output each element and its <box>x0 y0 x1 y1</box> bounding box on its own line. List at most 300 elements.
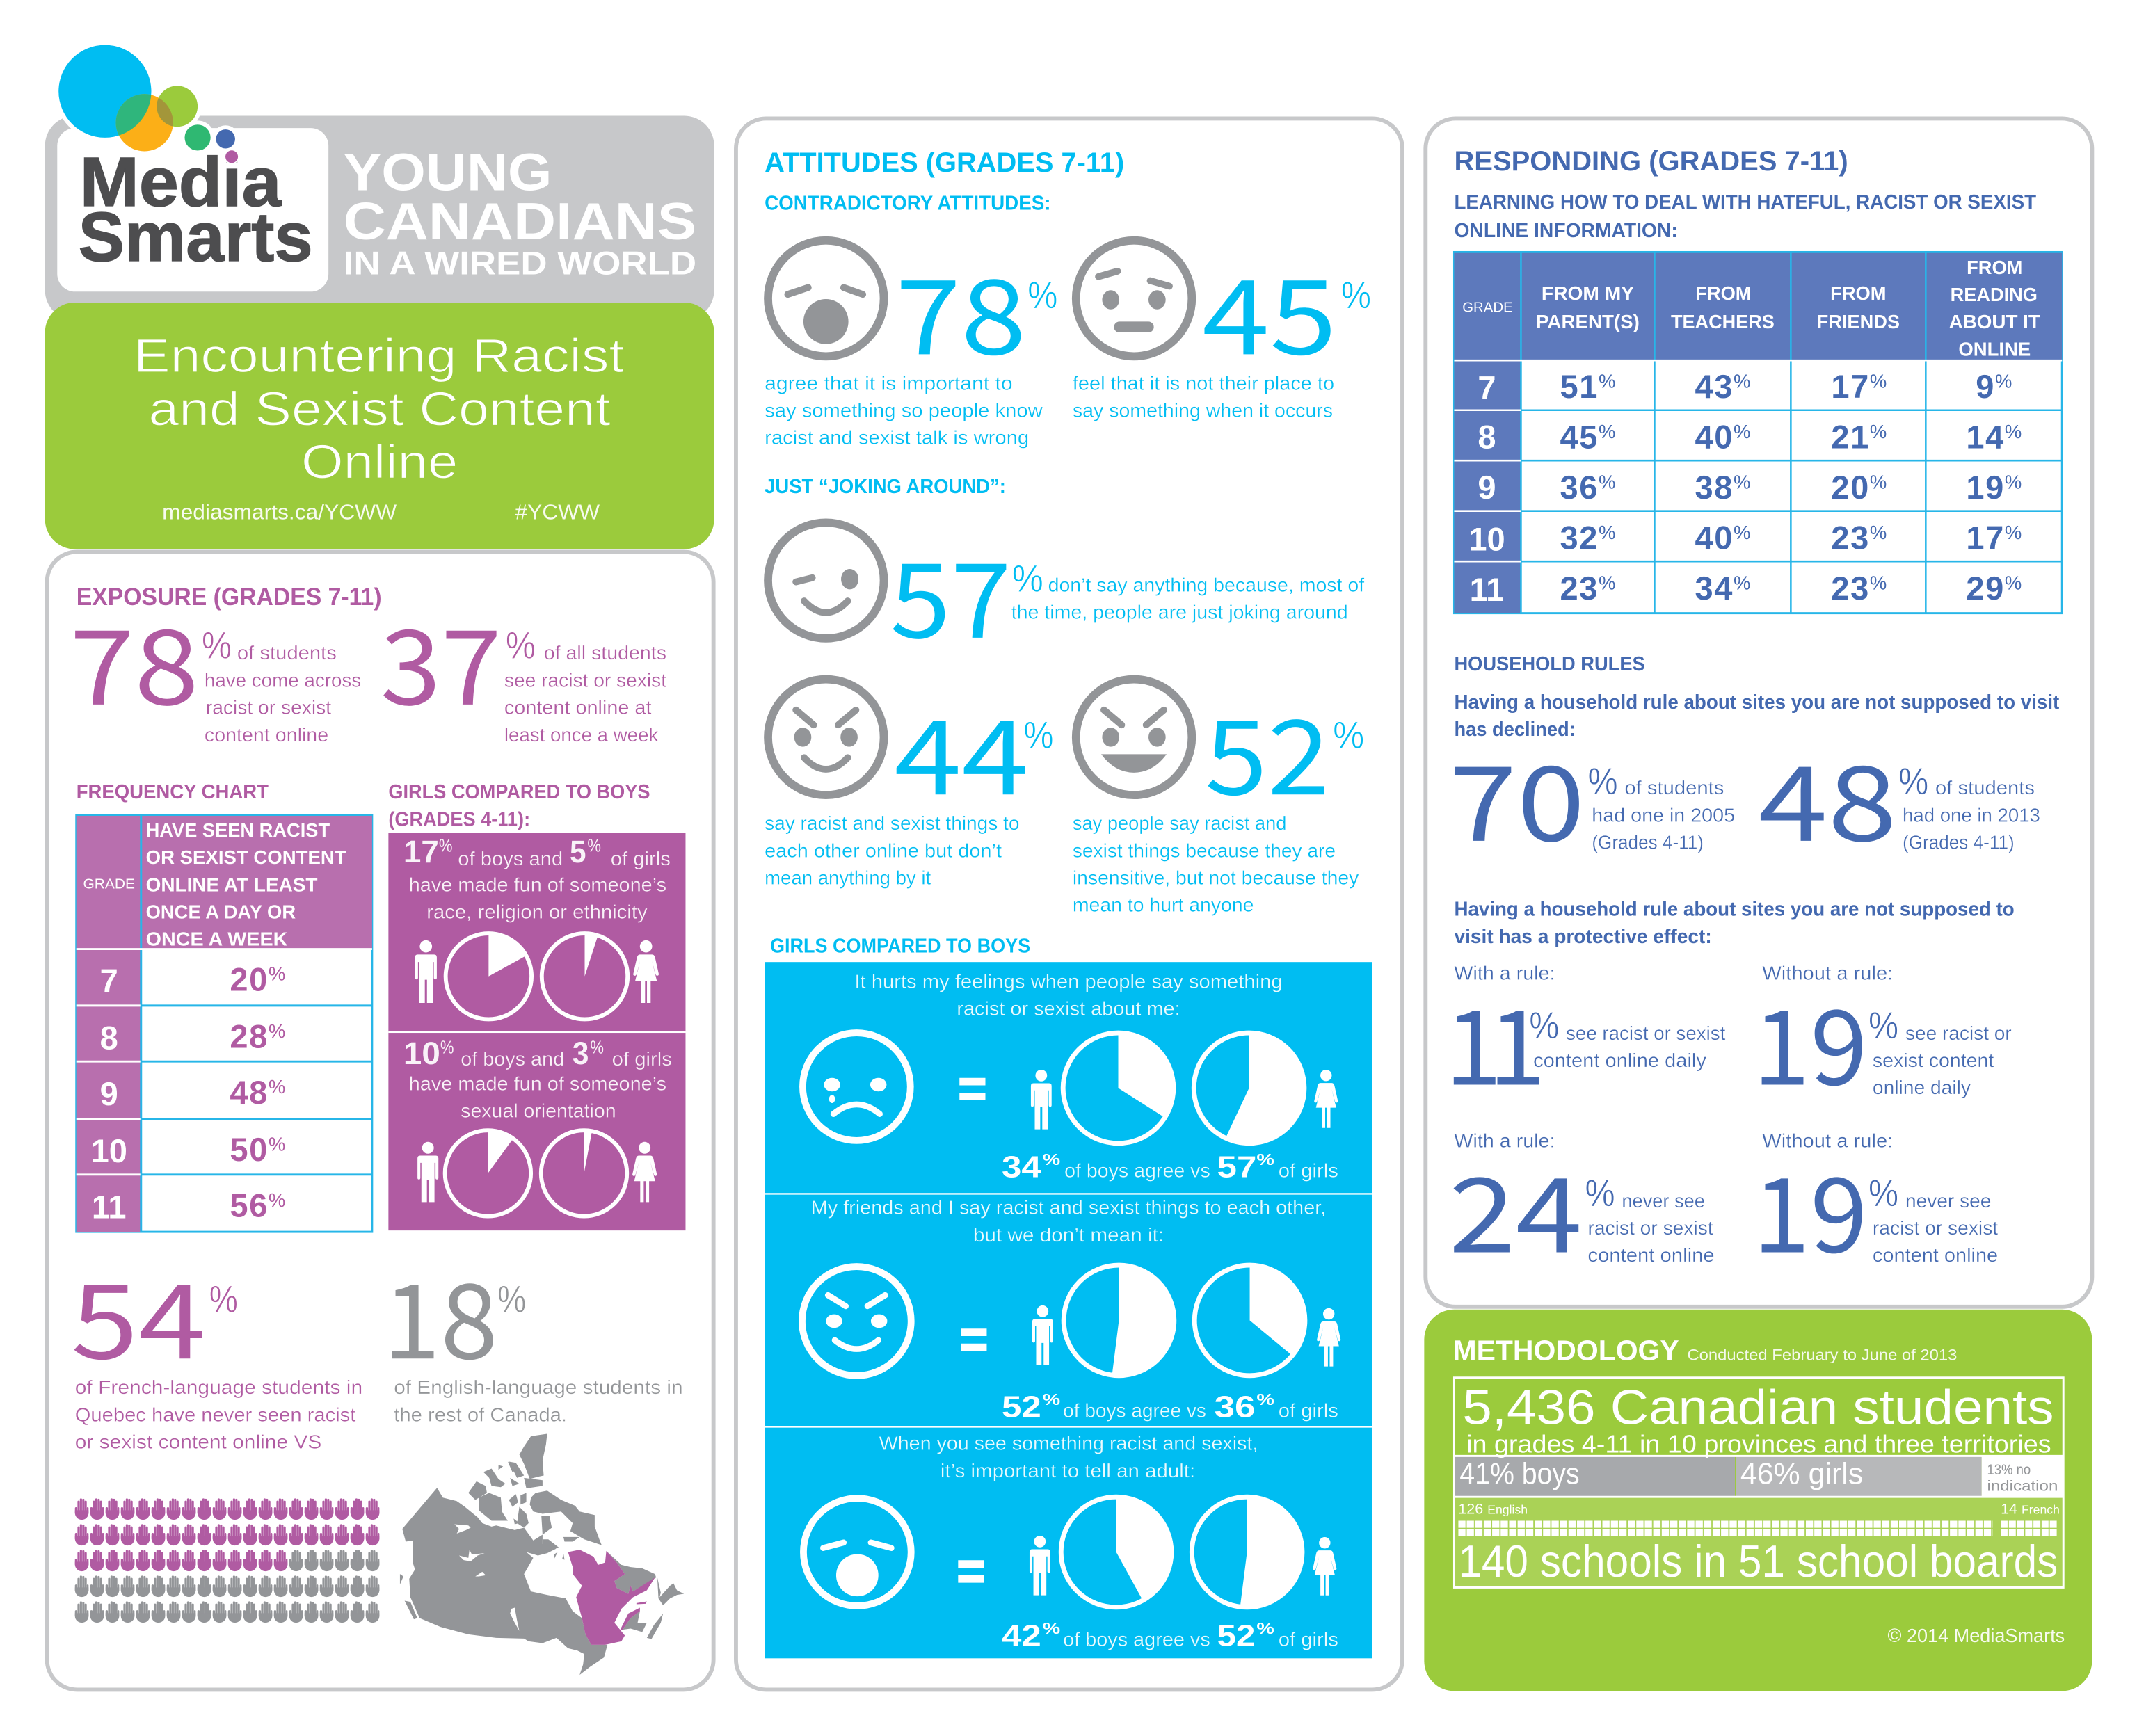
stat: 52 percent: % <box>1333 714 1364 757</box>
stat: 52 percent: mean to hurt anyone <box>1073 894 1254 916</box>
icon: girl <box>632 1142 657 1202</box>
table: frequency chart: % <box>269 1020 285 1042</box>
table: learning sources by grade: 51 <box>1560 368 1599 405</box>
stat: without a rule 19 percent: see racist or <box>1905 1022 2012 1044</box>
table: learning sources by grade: 10 <box>1468 521 1505 558</box>
pie chart: boys 52 percent <box>1064 1263 1176 1378</box>
title: Encountering Racist <box>134 329 624 383</box>
question: hurts my feelings <box>854 970 1283 1020</box>
stat: without a rule 19 percent: online daily <box>1873 1077 1971 1098</box>
stat: 54 percent French-language students: Quebec have never seen racist <box>75 1404 356 1425</box>
pie chart: girls 5 percent <box>542 933 627 1019</box>
stat: without a rule 19 percent never see: racist or sexist <box>1873 1217 1998 1239</box>
question: don't mean it: My friends and I say racist and sexist things to each other, <box>811 1197 1326 1219</box>
result: 52 vs 36: of boys agree vs <box>1063 1400 1206 1422</box>
table: learning sources by grade: 19 <box>1966 469 2005 506</box>
table: learning sources by grade: FROM <box>1695 282 1752 304</box>
table: learning sources by grade: % <box>1995 370 2012 392</box>
text: sexual orientation <box>403 1036 672 1122</box>
stat: 52 percent: insensitive, but not because they <box>1073 867 1359 889</box>
stat: 70 percent in 2005: (Grades 4-11) <box>1592 832 1704 853</box>
table: frequency chart: ONCE A DAY OR <box>146 900 296 922</box>
text: race, religion or ethnicity: race, religion or ethnicity <box>426 901 648 922</box>
table: learning sources by grade: % <box>1599 421 1615 442</box>
stat: without a rule 19 percent never see: Without a rule: <box>1762 1130 1893 1152</box>
icon: girl <box>1313 1537 1336 1596</box>
table: learning sources by grade: FROM <box>1830 282 1887 304</box>
table: frequency chart: 7 <box>100 962 118 999</box>
icon: shouting face <box>768 241 884 356</box>
subheading: girls compared to boys: GIRLS COMPARED TO BOYS <box>770 935 1030 957</box>
stat: with a rule 24 percent: never see <box>1622 1190 1705 1212</box>
icon: girl <box>1314 1070 1338 1128</box>
symbol: equals <box>961 1328 986 1351</box>
stat: 78 percent: % <box>202 623 232 666</box>
stat: 37 percent <box>381 584 666 746</box>
stat: 37 percent: of all students <box>544 642 666 664</box>
icon: winking face <box>768 522 884 638</box>
stat: without a rule 19 percent never see: 19 <box>1753 1132 1868 1282</box>
pie chart: boys 42 percent <box>1061 1495 1174 1607</box>
stat: 44 percent: 44 <box>894 674 1029 824</box>
text: sexual orientation: have made fun of someone’s <box>409 1072 666 1094</box>
panel: attitudes <box>736 118 1402 1689</box>
result: 52 vs 36: 52 <box>1002 1391 1041 1424</box>
text: rule has declined <box>1454 691 2060 741</box>
pie chart: girls 3 percent <box>541 1130 627 1216</box>
stat: 57 percent: the time, people are just joking around <box>1011 601 1348 622</box>
result: 42 vs 52: of girls <box>1279 1629 1338 1650</box>
title: Online <box>301 435 458 489</box>
panel: responding <box>1425 118 2092 1307</box>
table: frequency chart: GRADE <box>83 876 135 892</box>
text: protective effect: Having a household rule about sites you are not supposed to <box>1454 899 2015 921</box>
table: learning sources by grade: % <box>1870 572 1887 593</box>
chart: sample breakdown: 5,436 Canadian students <box>1462 1379 2054 1434</box>
text: protective effect <box>1454 899 2015 948</box>
text: sexual orientation: 3 <box>573 1036 589 1071</box>
chart: sample breakdown: 14 French <box>2001 1500 2060 1518</box>
text: race, religion or ethnicity: % <box>439 836 452 855</box>
result: 42 vs 52 <box>1002 1619 1338 1653</box>
table: frequency chart: 56 <box>230 1187 269 1224</box>
text: sexual orientation: sexual orientation <box>461 1100 616 1122</box>
icon: boy <box>1031 1070 1052 1130</box>
table: learning sources by grade: % <box>1870 421 1887 442</box>
links: mediasmarts.ca/YCWW <box>162 501 397 524</box>
table: learning sources by grade: 7 <box>1478 369 1496 406</box>
text: race, religion or ethnicity: of boys and <box>458 848 563 869</box>
result: 52 vs 36 <box>1002 1390 1338 1424</box>
text: race, religion or ethnicity: % <box>587 836 601 855</box>
stat: 18 percent English-language students: the rest of Canada. <box>394 1404 567 1425</box>
subheading: learning how to deal: LEARNING HOW TO DEAL WITH HATEFUL, RACIST OR SEXIST <box>1454 191 2037 214</box>
table: learning sources by grade: % <box>2005 421 2022 442</box>
result: 52 vs 36: of girls <box>1279 1400 1338 1422</box>
stat: with a rule 11 percent: content online daily <box>1533 1050 1706 1071</box>
table: frequency chart: 20 <box>230 961 269 997</box>
stat: 70 percent in 2005: % <box>1587 760 1618 803</box>
stat: 48 percent in 2013: had one in 2013 <box>1903 804 2040 826</box>
table: frequency chart: ONLINE AT LEAST <box>146 873 317 895</box>
heading: frequency chart: FREQUENCY CHART <box>77 781 269 803</box>
heading: Young Canadians in a Wired World: YOUNG <box>344 143 552 201</box>
stat: 18 percent English-language students: of English-language students in <box>394 1376 683 1398</box>
table: learning sources by grade: 40 <box>1695 419 1734 456</box>
stat: 52 percent: say people say racist and <box>1073 812 1286 834</box>
stat: 78 percent: racist or sexist <box>206 697 331 718</box>
table: learning sources by grade: 32 <box>1560 520 1599 556</box>
table: frequency chart: % <box>269 1076 285 1098</box>
text: race, religion or ethnicity: have made fun of someone’s <box>409 874 666 895</box>
heading: girls compared to boys: (GRADES 4-11): <box>388 808 530 830</box>
table: learning sources by grade: 40 <box>1695 520 1734 556</box>
table: frequency chart: % <box>269 1134 285 1155</box>
table: frequency chart: HAVE SEEN RACIST <box>146 819 330 841</box>
table: learning sources by grade: FRIENDS <box>1817 310 1900 332</box>
heading: methodology: METHODOLOGY <box>1452 1334 1679 1366</box>
pie chart: boys 17 percent <box>446 933 531 1019</box>
stat: 70 percent in 2005 <box>1449 721 1735 871</box>
table: learning sources by grade: 11 <box>1470 571 1504 608</box>
subheading: household rules: HOUSEHOLD RULES <box>1454 653 1645 675</box>
table: frequency chart: 9 <box>100 1075 118 1112</box>
stat: 18 percent English-language students <box>383 1238 683 1425</box>
stat: without a rule 19 percent never see <box>1753 1130 1998 1282</box>
stat: without a rule 19 percent: sexist content <box>1873 1050 1994 1071</box>
stat: 37 percent: see racist or sexist <box>504 669 666 691</box>
heading: methodology <box>1452 1334 1957 1366</box>
icon: girl <box>633 940 659 1003</box>
stat: 78 percent: 78 <box>895 234 1026 384</box>
chart: sample breakdown: 13% no <box>1987 1461 2031 1478</box>
stat: without a rule 19 percent: Without a rule: <box>1762 963 1893 984</box>
heading: girls compared to boys <box>388 781 650 830</box>
stat: 48 percent in 2013: % <box>1898 760 1928 803</box>
stat: without a rule 19 percent: 19 <box>1753 965 1868 1115</box>
stat: 70 percent in 2005: of students <box>1624 777 1724 798</box>
result: 34 vs 57: 34 <box>1002 1151 1041 1184</box>
text: rule has declined: Having a household rule about sites you are not supposed to visit <box>1454 691 2060 714</box>
stat: without a rule 19 percent never see: content online <box>1873 1244 1998 1266</box>
text: rule has declined: has declined: <box>1454 718 1576 741</box>
stat: without a rule 19 percent never see: % <box>1868 1171 1898 1214</box>
stat: 78 percent: racist and sexist talk is wrong <box>765 427 1029 449</box>
icon: boy <box>1030 1536 1050 1596</box>
heading: methodology: Conducted February to June of 2013 <box>1687 1346 1957 1363</box>
stat: 48 percent in 2013 <box>1758 721 2040 871</box>
stat: 78 percent <box>765 234 1057 449</box>
text: sexual orientation: % <box>440 1038 454 1057</box>
stat: with a rule 11 percent: 1 <box>1488 965 1546 1115</box>
table: learning sources by grade: FROM <box>1967 256 2022 278</box>
chart: sample breakdown: in grades 4-11 in 10 provinces and three territories <box>1466 1429 2051 1458</box>
icon: boy <box>417 1142 438 1202</box>
result: 34 vs 57: of girls <box>1279 1160 1338 1182</box>
icon: boy <box>415 940 437 1003</box>
chart: sample breakdown: indication <box>1987 1477 2058 1494</box>
question: tell an adult: When you see something racist and sexist, <box>879 1433 1258 1454</box>
table: frequency chart: 48 <box>230 1074 269 1111</box>
table: frequency chart: 10 <box>91 1132 127 1169</box>
result: 42 vs 52: % <box>1256 1619 1274 1637</box>
subheading: just joking around: JUST “JOKING AROUND”: <box>765 476 1006 498</box>
table: learning sources by grade: % <box>1870 471 1887 492</box>
table: learning sources by grade: % <box>2005 522 2022 543</box>
links <box>162 501 600 524</box>
stat: 44 percent: % <box>1023 714 1053 757</box>
stat: 44 percent: each other online but don’t <box>765 839 1002 861</box>
table: frequency chart: 50 <box>230 1131 269 1168</box>
stat: 45 percent <box>1073 234 1371 421</box>
stat: 45 percent: 45 <box>1202 234 1337 384</box>
table: learning sources by grade: 23 <box>1831 570 1870 606</box>
stat: 78 percent: of students <box>237 642 337 664</box>
stat: with a rule 11 percent <box>1445 963 1726 1115</box>
heading: Young Canadians in a Wired World: CANADIANS <box>344 192 696 250</box>
table: learning sources by grade: 21 <box>1831 419 1870 456</box>
copyright: © 2014 MediaSmarts <box>1887 1625 2065 1646</box>
table: learning sources by grade: % <box>1599 370 1615 392</box>
text: sexual orientation: of girls <box>612 1048 672 1070</box>
panel: exposure <box>47 552 714 1689</box>
stat: with a rule 24 percent: With a rule: <box>1454 1130 1555 1152</box>
chart: sample breakdown: 140 schools in 51 school boards <box>1458 1536 2058 1586</box>
stat: 78 percent: % <box>1027 273 1057 316</box>
stat: with a rule 11 percent: With a rule: <box>1454 963 1555 984</box>
stat: 78 percent <box>70 584 361 746</box>
table: frequency chart: ONCE A WEEK <box>146 928 288 950</box>
table: learning sources by grade: READING <box>1951 283 2038 305</box>
result: 42 vs 52: of boys agree vs <box>1063 1629 1210 1650</box>
logo: MediaSmarts: Media <box>80 144 282 221</box>
pie chart: girls 57 percent <box>1194 1031 1306 1146</box>
stat: 70 percent in 2005: had one in 2005 <box>1592 804 1735 826</box>
stat: 78 percent: 78 <box>70 584 199 734</box>
heading: Young Canadians in a Wired World <box>344 143 696 281</box>
table: learning sources by grade: GRADE <box>1462 300 1513 316</box>
stat: 78 percent: say something so people know <box>765 400 1043 421</box>
symbol: equals <box>959 1078 985 1100</box>
stat: with a rule 24 percent: % <box>1585 1171 1615 1214</box>
table: learning sources by grade: PARENT(S) <box>1536 310 1640 332</box>
icon: crying face <box>803 1033 911 1141</box>
result: 34 vs 57 <box>1002 1150 1338 1184</box>
table: learning sources by grade: 43 <box>1695 368 1734 405</box>
table: learning sources by grade: 45 <box>1560 419 1599 456</box>
heading: exposure: EXPOSURE (GRADES 7-11) <box>77 584 382 611</box>
text: race, religion or ethnicity: 17 <box>403 834 439 869</box>
stat: 18 percent English-language students: 18 <box>383 1238 498 1388</box>
table: learning sources by grade: % <box>1870 370 1887 392</box>
table: frequency chart: 8 <box>100 1020 118 1056</box>
subheading: contradictory attitudes: CONTRADICTORY ATTITUDES: <box>765 193 1051 215</box>
heading: Young Canadians in a Wired World: IN A WIRED WORLD <box>344 244 696 281</box>
table: learning sources by grade: % <box>1599 471 1615 492</box>
table: learning sources by grade: ONLINE <box>1958 337 2031 360</box>
stat: with a rule 11 percent: see racist or sexist <box>1566 1022 1726 1044</box>
table: learning sources by grade: % <box>2005 471 2022 492</box>
result: 34 vs 57: % <box>1256 1150 1274 1168</box>
stat: 78 percent: agree that it is important to <box>765 372 1013 394</box>
stat: 48 percent in 2013: (Grades 4-11) <box>1903 832 2015 853</box>
table: learning sources by grade: % <box>1599 572 1615 593</box>
subheading: learning how to deal <box>1454 191 2037 242</box>
pie chart: boys 10 percent <box>445 1130 531 1216</box>
result: 42 vs 52: 52 <box>1217 1620 1255 1653</box>
stat: 37 percent: % <box>506 623 536 666</box>
stat: 54 percent French-language students: or sexist content online VS <box>75 1431 321 1453</box>
question: don't mean it: but we don’t mean it: <box>973 1224 1164 1246</box>
stat: 57 percent: % <box>1012 556 1043 600</box>
table: learning sources by grade: 8 <box>1478 419 1496 456</box>
stat: 78 percent: content online <box>205 724 328 746</box>
table: learning sources by grade <box>1454 252 2062 613</box>
map: Canada with Quebec highlighted <box>400 1434 684 1675</box>
table: learning sources by grade: 20 <box>1831 469 1870 506</box>
table: learning sources by grade: 14 <box>1966 419 2005 456</box>
panel: girls vs boys made fun of <box>388 833 685 1230</box>
table: learning sources by grade: 17 <box>1966 520 2005 556</box>
table: frequency chart <box>77 815 372 1232</box>
stat: 44 percent: mean anything by it <box>765 867 931 889</box>
chart: sample breakdown <box>1454 1378 2063 1587</box>
chart: sample breakdown: 41% boys <box>1459 1458 1580 1491</box>
icon: girl <box>1317 1308 1340 1367</box>
result: 52 vs 36: 36 <box>1215 1391 1255 1424</box>
table: learning sources by grade: % <box>1870 522 1887 543</box>
table: learning sources by grade: 17 <box>1831 368 1870 405</box>
table: frequency chart: 28 <box>230 1018 269 1055</box>
table: learning sources by grade: 38 <box>1695 469 1734 506</box>
stat: 70 percent in 2005: 70 <box>1449 721 1585 871</box>
text: race, religion or ethnicity: 5 <box>570 834 586 869</box>
pictogram: 100 hands, 54 highlighted <box>75 1498 379 1623</box>
table: learning sources by grade: FROM MY <box>1542 282 1634 304</box>
stat: 57 percent <box>890 517 1364 668</box>
table: learning sources by grade: TEACHERS <box>1671 310 1775 332</box>
stat: 54 percent French-language students: of French-language students in <box>75 1376 362 1398</box>
stat: 37 percent: content online at <box>504 697 652 718</box>
links: #YCWW <box>515 501 600 524</box>
result: 34 vs 57: of boys agree vs <box>1064 1160 1210 1182</box>
table: learning sources by grade: 36 <box>1560 469 1599 506</box>
result: 34 vs 57: 57 <box>1217 1151 1256 1184</box>
text: sexual orientation: of boys and <box>461 1048 564 1070</box>
text: race, religion or ethnicity <box>403 834 671 922</box>
table: learning sources by grade: % <box>1734 421 1750 442</box>
icon: boy <box>1032 1305 1053 1365</box>
stat: with a rule 24 percent: racist or sexist <box>1587 1217 1713 1239</box>
panel: title <box>45 303 714 549</box>
icon: mischievous laughing face <box>1076 680 1192 795</box>
table: learning sources by grade: 9 <box>1478 469 1496 506</box>
table: learning sources by grade: % <box>1734 471 1750 492</box>
stat: 45 percent: feel that it is not their place to <box>1073 372 1334 394</box>
table: learning sources by grade: 23 <box>1831 520 1870 556</box>
stat: 44 percent <box>765 674 1053 889</box>
text: protective effect: visit has a protective effect: <box>1454 926 1712 948</box>
result: 52 vs 36: % <box>1043 1390 1060 1408</box>
result: 34 vs 57: % <box>1043 1150 1060 1168</box>
chart: sample breakdown: 46% girls <box>1740 1458 1863 1491</box>
logo: MediaSmarts: Smarts <box>79 199 313 276</box>
stat: 54 percent French-language students: 54 <box>71 1238 206 1388</box>
title: and Sexist Content <box>149 382 611 435</box>
stat: 45 percent: say something when it occurs <box>1073 400 1333 421</box>
panel: girls compared to boys comparisons <box>765 962 1372 1658</box>
table: learning sources by grade: 9 <box>1976 368 1995 405</box>
table: learning sources by grade: % <box>2005 572 2022 593</box>
stat: without a rule 19 percent: % <box>1868 1004 1898 1047</box>
stat: 52 percent: 52 <box>1205 674 1330 824</box>
heading: attitudes: ATTITUDES (GRADES 7-11) <box>765 147 1124 178</box>
table: learning sources by grade: % <box>1734 572 1750 593</box>
heading: responding: RESPONDING (GRADES 7-11) <box>1454 145 1848 177</box>
icon: mischievous smiling face <box>768 680 884 795</box>
table: learning sources by grade: % <box>1734 370 1750 392</box>
pie chart: girls 52 percent <box>1192 1495 1304 1609</box>
chart: sample breakdown: 126 English <box>1458 1500 1528 1518</box>
heading: girls compared to boys: GIRLS COMPARED TO BOYS <box>388 781 650 803</box>
pie chart: boys 34 percent <box>1063 1031 1176 1143</box>
stat: with a rule 24 percent: 24 <box>1449 1132 1583 1282</box>
question: don't mean it <box>811 1197 1326 1246</box>
stat: 57 percent: 57 <box>890 517 1011 668</box>
question: hurts my feelings: racist or sexist about me: <box>957 998 1180 1020</box>
stat: without a rule 19 percent never see: never see <box>1905 1190 1991 1212</box>
result: 42 vs 52: % <box>1043 1619 1060 1637</box>
stat: 78 percent: have come across <box>205 669 361 691</box>
icon: shouting face <box>803 1498 911 1606</box>
stat: 48 percent in 2013: of students <box>1935 777 2035 798</box>
pie chart: girls 36 percent <box>1194 1263 1307 1376</box>
icon: mischievous face <box>802 1267 911 1376</box>
question: tell an adult <box>879 1433 1258 1481</box>
stat: 37 percent: least once a week <box>504 724 658 746</box>
table: learning sources by grade: 34 <box>1695 570 1734 606</box>
result: 52 vs 36: % <box>1256 1390 1274 1408</box>
logo: MediaSmarts <box>54 41 313 276</box>
subheading: learning how to deal: ONLINE INFORMATION: <box>1454 220 1678 242</box>
table: frequency chart: % <box>269 963 285 985</box>
table: learning sources by grade: 23 <box>1560 570 1599 606</box>
table: frequency chart: 11 <box>92 1189 127 1225</box>
stat: 45 percent: % <box>1341 273 1371 316</box>
icon: worried face <box>1076 241 1192 356</box>
table: learning sources by grade: 29 <box>1966 570 2005 606</box>
table: frequency chart: % <box>269 1189 285 1211</box>
symbol: equals <box>958 1560 984 1583</box>
stat: 48 percent in 2013: 48 <box>1758 721 1897 871</box>
table: frequency chart: OR SEXIST CONTENT <box>146 846 346 868</box>
stat: with a rule 11 percent: 1 <box>1445 965 1502 1115</box>
panel: methodology <box>1424 1310 2092 1691</box>
stat: with a rule 11 percent: % <box>1529 1004 1559 1047</box>
stat: 44 percent: say racist and sexist things to <box>765 812 1019 834</box>
stat: 52 percent <box>1073 674 1364 916</box>
table: learning sources by grade: % <box>1734 522 1750 543</box>
table: learning sources by grade: % <box>1599 522 1615 543</box>
panel: header banner <box>45 41 714 320</box>
stat: 54 percent French-language students: % <box>209 1278 238 1321</box>
question: hurts my feelings: It hurts my feelings when people say something <box>854 970 1283 992</box>
stat: without a rule 19 percent <box>1753 963 2012 1115</box>
text: sexual orientation: % <box>590 1038 604 1057</box>
text: race, religion or ethnicity: of girls <box>611 848 671 869</box>
stat: 54 percent French-language students <box>71 1238 362 1453</box>
stat: 37 percent: 37 <box>381 584 502 734</box>
